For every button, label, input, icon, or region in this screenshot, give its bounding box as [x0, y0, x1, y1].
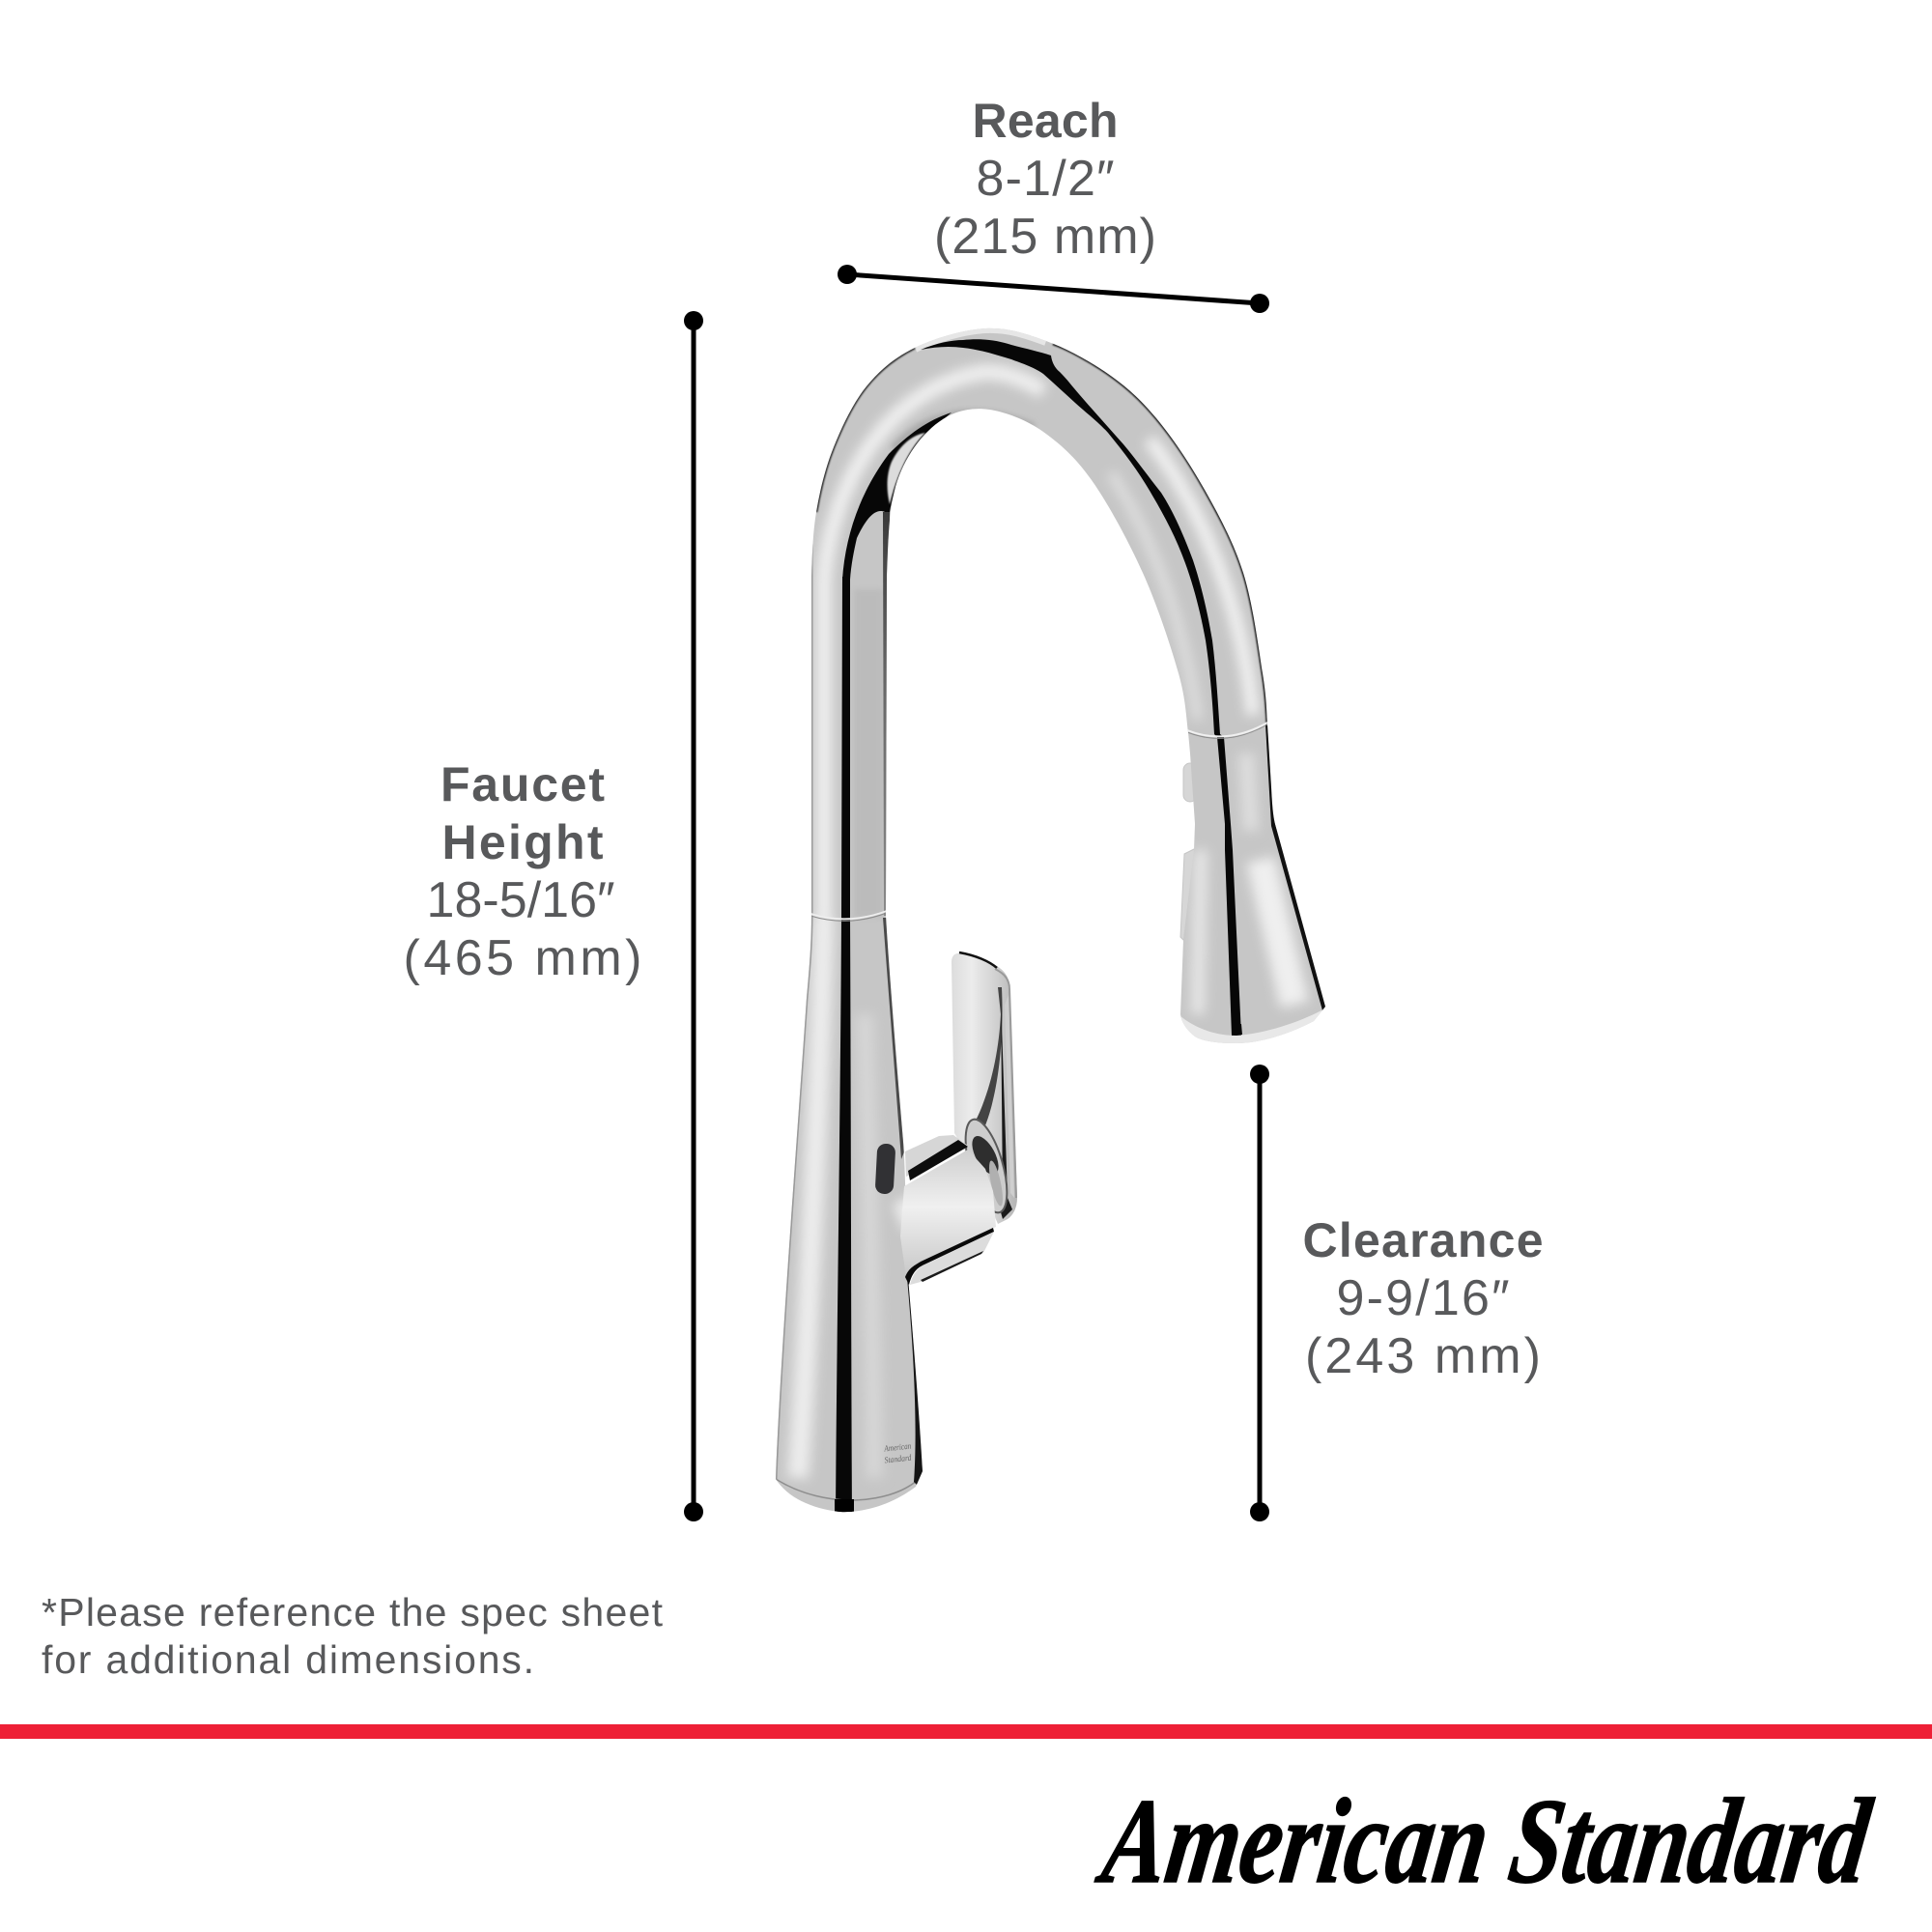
faucet height label: 18-5/16″: [427, 872, 614, 928]
faucet height label: Height: [442, 815, 604, 869]
base ring: [776, 1479, 918, 1500]
reach dimension line: [838, 265, 1269, 313]
clearance label: [1302, 1213, 1544, 1384]
reach label: [934, 94, 1156, 265]
clearance label: (243 mm): [1305, 1328, 1541, 1384]
faucet illustration: [763, 319, 1343, 1526]
clearance label: Clearance: [1302, 1213, 1544, 1267]
faucet engraved logo: [883, 1441, 913, 1465]
handle lever: [952, 952, 1017, 1224]
clearance label: 9-9/16″: [1337, 1270, 1509, 1326]
faucet engraved logo: American: [883, 1441, 912, 1454]
spray head trigger buttons: [1180, 763, 1198, 941]
footnote: [42, 1590, 664, 1682]
stem spout and spray head: [763, 319, 1343, 1526]
faucet engraved logo: Standard: [884, 1453, 912, 1465]
inner bend highlight: [888, 433, 925, 504]
faucet height dimension line: [684, 311, 703, 1521]
faucet height label: (465 mm): [404, 930, 641, 986]
dark stem panel: [856, 591, 881, 916]
bright reflection bands: [798, 372, 1294, 1478]
footnote: for additional dimensions.: [42, 1637, 534, 1682]
spout seam lines: [810, 723, 1267, 921]
spray head rim: [1180, 1010, 1321, 1043]
black reflection on stem: [836, 577, 852, 1517]
sensor window: [875, 1144, 895, 1194]
arm connector: [900, 1135, 996, 1285]
red divider bar: [0, 1724, 1932, 1739]
reach label: Reach: [972, 94, 1119, 148]
clearance dimension line: [1250, 1065, 1269, 1521]
handle pivot joint: [957, 1115, 1015, 1217]
outer black edge of spray head: [1265, 724, 1327, 1010]
footnote: *Please reference the spec sheet: [42, 1590, 664, 1634]
soft grey under the bend: [894, 413, 1034, 449]
pale rim at crown: [915, 328, 1046, 348]
black reflection along spout: [921, 339, 1241, 1036]
faucet height label: Faucet: [440, 757, 605, 811]
right edge reflections on body: [883, 918, 905, 1159]
black reflection at inner bend: [842, 412, 952, 580]
reach label: (215 mm): [934, 209, 1156, 265]
faucet height label: [404, 757, 641, 986]
reach label: 8-1/2″: [976, 151, 1115, 207]
dark outer rim: [776, 344, 1267, 1479]
dark rim inside stem: [883, 512, 890, 916]
